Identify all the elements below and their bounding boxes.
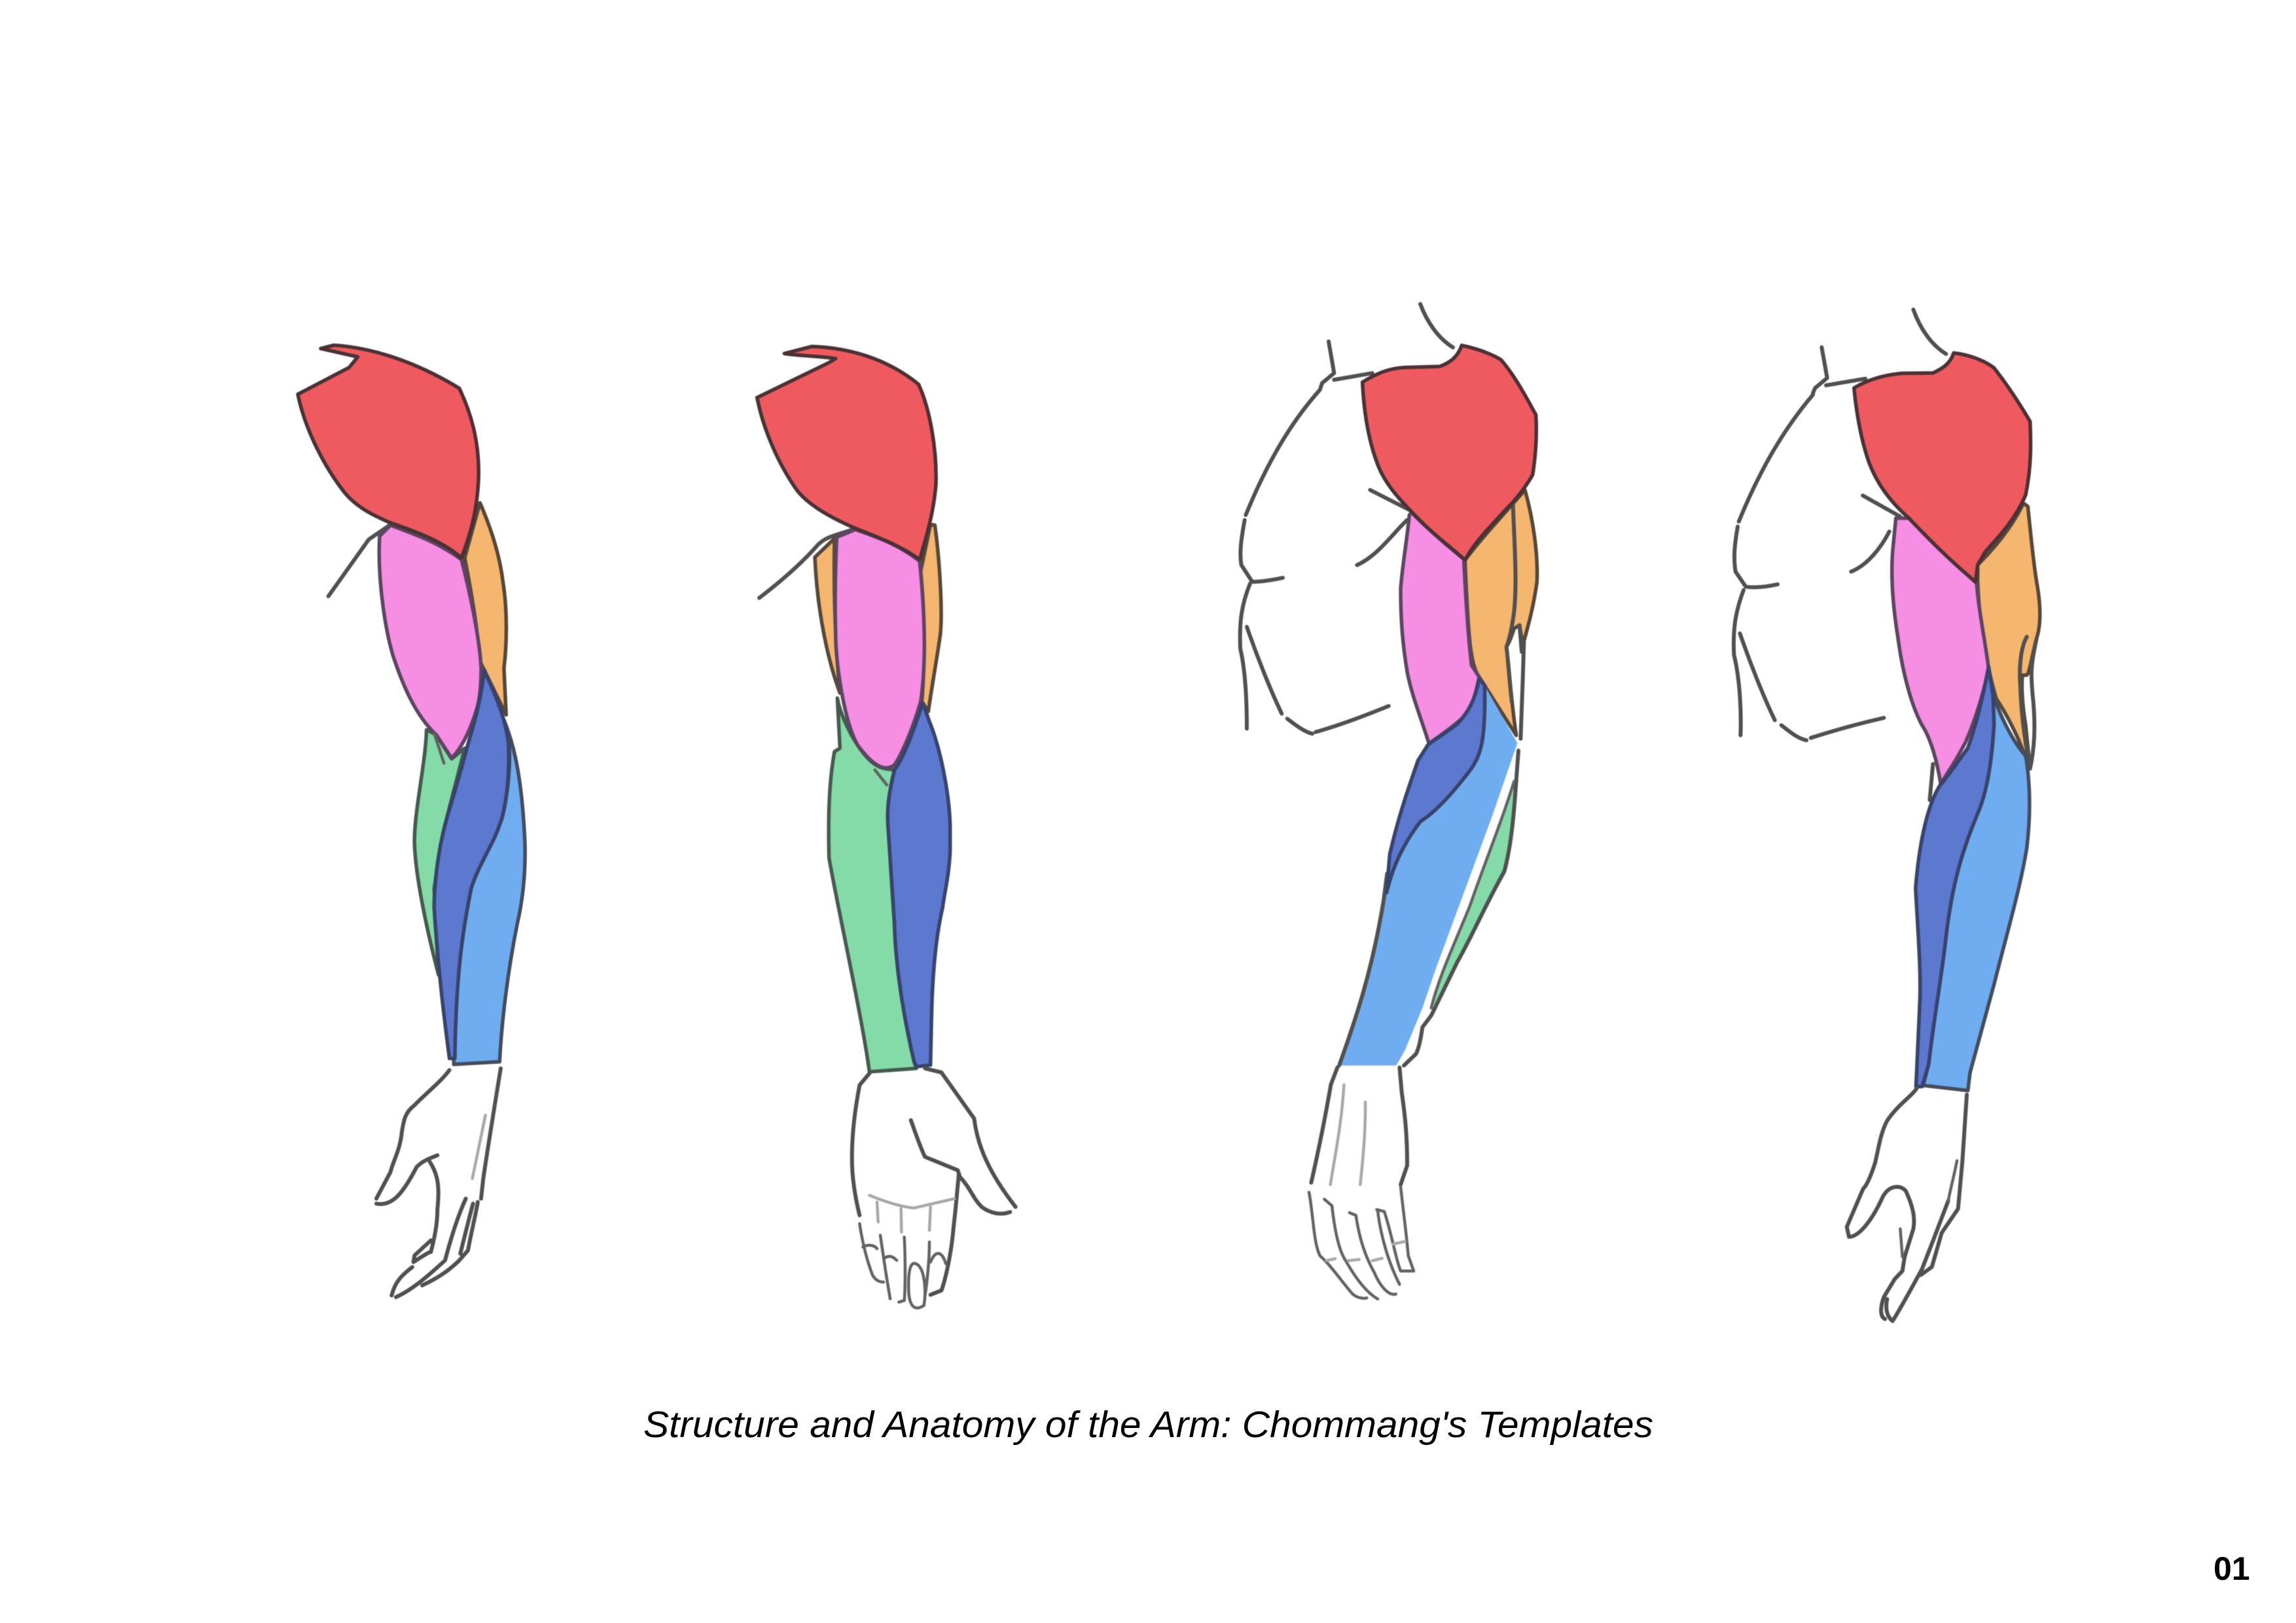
arm 3: three-quarter view with torso: [1240, 304, 1537, 1299]
arm 4 biceps (pink): [1892, 518, 1988, 783]
arm 3 brachioradialis (dark blue): [1386, 679, 1485, 893]
arm 3 light blue left edge: [1339, 874, 1387, 1065]
arm 1 biceps (pink): [379, 525, 481, 758]
arm 1 hand: [376, 1069, 501, 1297]
arm 1 brachioradialis (dark blue): [434, 669, 509, 1058]
arm 4 hand: [1847, 1088, 1967, 1321]
arm 3 upper drawing: [1240, 304, 1537, 743]
arm 4 forearm extensor (light blue): [1923, 695, 2030, 1090]
arm 3 deltoid (red): [1363, 346, 1536, 560]
arm 4 forearm and hand: [1847, 667, 2030, 1321]
arm 1 forearm flexor (green): [414, 730, 465, 975]
arm 3 triceps outer line: [1520, 625, 1524, 739]
arm 3 outer forearm line: [1404, 751, 1518, 1065]
arm 1: side view: [298, 345, 525, 1297]
arm 4 triceps outer line: [2030, 639, 2037, 768]
arm 4 inner elbow line: [1929, 764, 1933, 800]
page number: 01: [2214, 1550, 2250, 1587]
arm 2 drawing: [757, 346, 1016, 1308]
arm 1 deltoid (red): [298, 345, 478, 558]
arm 1 drawing: [298, 345, 525, 1297]
arm 2 shoulder stub line: [759, 529, 853, 598]
arm 2: front view: [757, 346, 1016, 1308]
arm 2 forearm flexor (green): [829, 698, 916, 1072]
arm 3 triceps inner line: [1507, 505, 1515, 702]
arm 3 forearm and hand: [1309, 679, 1518, 1299]
arm 2 hand: [852, 1069, 1016, 1308]
arm 2 biceps (pink): [835, 529, 924, 768]
arm 4 upper drawing: [1734, 310, 2040, 783]
arm 1 forearm extensor (light blue): [454, 720, 525, 1064]
arm 3 torso outline: [1240, 304, 1453, 734]
arm 2 triceps left (orange): [815, 539, 840, 693]
caption: Structure and Anatomy of the Arm: Chommang's Templates: [643, 1404, 1653, 1446]
arm 3 triceps (orange): [1465, 490, 1537, 736]
arm 4 triceps inner line: [2020, 637, 2030, 768]
arm 1 triceps (orange): [465, 503, 507, 715]
arm 3 biceps (pink): [1401, 512, 1479, 743]
arm 4 triceps (orange): [1978, 503, 2040, 768]
arm 4 torso outline: [1734, 310, 1946, 740]
arm 3 forearm extensor (light blue): [1340, 684, 1517, 1065]
arm 1 green crease: [434, 733, 444, 763]
arm 3 hand: [1309, 1067, 1414, 1299]
arm 2 green crease: [875, 770, 887, 785]
arm 2 brachioradialis (dark blue): [888, 703, 950, 1067]
arm 4 brachioradialis (dark blue): [1916, 667, 1994, 1086]
arm 1 shoulder stub line: [329, 524, 391, 596]
arm 2 deltoid (red): [757, 346, 936, 560]
arm 2 triceps right (orange): [921, 524, 941, 711]
arm 4: rotated view with torso: [1734, 310, 2040, 1321]
arm 3 green inner edge: [1431, 781, 1514, 1008]
arm 4 deltoid (red): [1854, 353, 2031, 582]
arm 3 forearm flexor (green): [1433, 777, 1515, 1006]
